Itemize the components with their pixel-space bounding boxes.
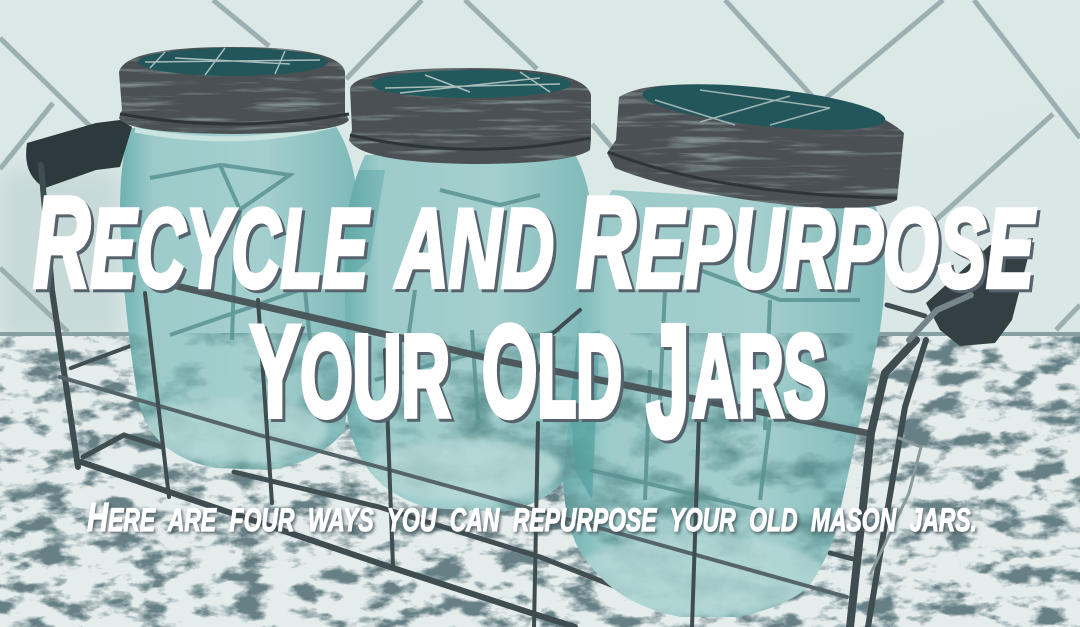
jar lid: right (607, 84, 904, 208)
title line 2: YOUR (250, 298, 450, 444)
title line 2: J (646, 291, 690, 470)
title line 2 (250, 291, 826, 470)
title line 2: ARS (692, 311, 826, 441)
title line 2: OLD (482, 298, 622, 444)
photo background: tiled wall (0, 0, 1080, 340)
basket handle: left (26, 120, 132, 188)
title (33, 169, 1036, 315)
wire basket front (41, 165, 971, 627)
jar lid: left (115, 45, 355, 137)
jar: right (560, 190, 890, 620)
photo background: granite counter (0, 332, 1080, 627)
jar: left (110, 125, 360, 475)
wire basket back rails (71, 305, 925, 588)
title line 1: RECYCLE (33, 169, 370, 315)
jar: middle (340, 150, 600, 515)
title line 1: AND (394, 186, 554, 311)
jar lid: middle (345, 65, 595, 167)
basket handle: right (926, 238, 1033, 346)
title line 1 (33, 169, 1036, 315)
